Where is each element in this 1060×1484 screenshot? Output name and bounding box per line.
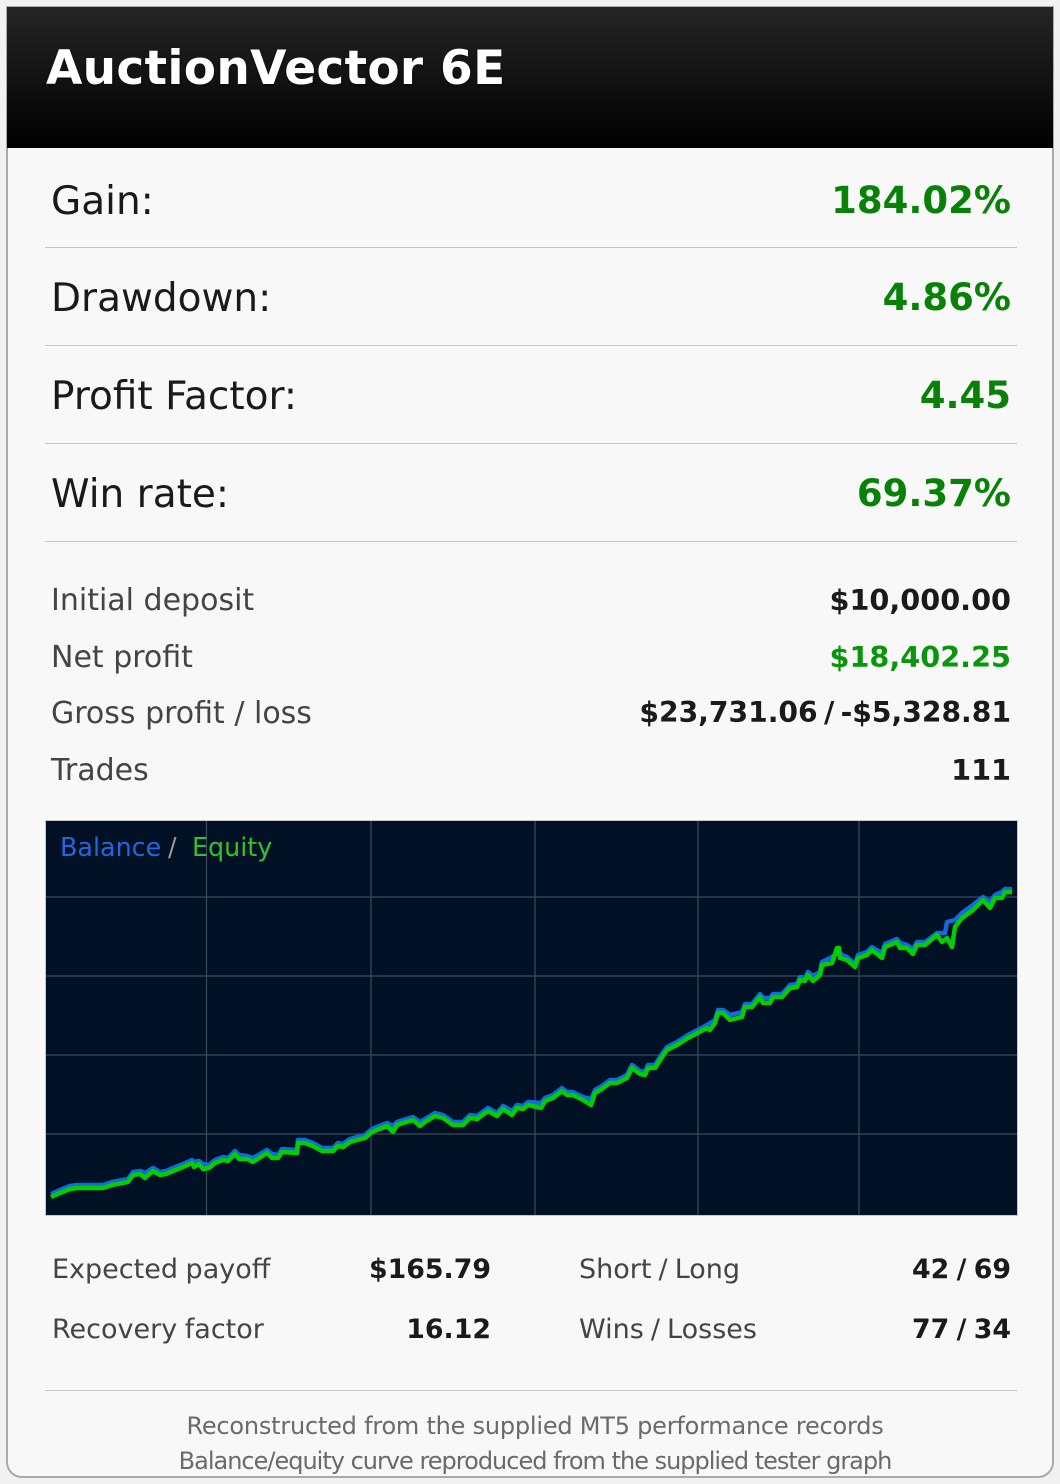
header band <box>7 7 1053 148</box>
footer note <box>179 1412 891 1475</box>
metric: gain <box>51 179 1011 224</box>
stat: recovery factor: Recovery factor <box>52 1314 264 1345</box>
metric: profit factor <box>51 374 1011 419</box>
metric: profit factor: Profit Factor: <box>51 374 297 419</box>
stat: recovery factor <box>52 1314 491 1345</box>
stat: expected payoff: $165.79 <box>369 1254 491 1285</box>
stat: initial deposit: Initial deposit <box>51 583 254 618</box>
footer note: Balance/equity curve reproduced from the supplied tester graph <box>179 1447 891 1475</box>
balance and equity chart <box>45 820 1018 1216</box>
equity line <box>51 892 1012 1197</box>
title: AuctionVector 6E <box>46 41 505 96</box>
stat: gross profit / loss: Gross profit / loss <box>51 696 312 731</box>
chart legend: / <box>168 832 177 862</box>
chart legend: Equity <box>192 832 272 862</box>
stat: initial deposit: $10,000.00 <box>830 583 1011 617</box>
metric: drawdown: Drawdown: <box>51 276 271 321</box>
metric: win rate: 69.37% <box>857 472 1011 515</box>
metric: gain: 184.02% <box>831 179 1011 222</box>
stat: gross profit / loss: $23,731.06 / -$5,328.81 <box>639 696 1011 729</box>
stat: net profit: Net profit <box>51 640 193 675</box>
stat: wins / losses <box>579 1314 1011 1345</box>
stat: expected payoff: Expected payoff <box>52 1254 270 1285</box>
stat: short / long <box>579 1254 1011 1285</box>
stat: trades <box>50 753 1011 788</box>
stat: trades: Trades <box>51 753 149 788</box>
footer note: Reconstructed from the supplied MT5 performance records <box>186 1412 884 1440</box>
stat: short / long: 42 / 69 <box>912 1254 1011 1285</box>
metric: win rate <box>51 472 1011 517</box>
stat: initial deposit <box>51 583 1011 618</box>
stat: net profit <box>51 640 1011 675</box>
metric: win rate: Win rate: <box>51 472 229 517</box>
metric: gain: Gain: <box>51 179 154 224</box>
metric: profit factor: 4.45 <box>920 374 1011 417</box>
chart legend: Balance <box>60 832 161 862</box>
stat: wins / losses: 77 / 34 <box>912 1314 1011 1345</box>
stat: wins / losses: Wins / Losses <box>579 1314 757 1345</box>
stat: expected payoff <box>52 1254 491 1285</box>
stat: short / long: Short / Long <box>579 1254 740 1285</box>
metric: drawdown: 4.86% <box>883 276 1011 319</box>
balance line <box>51 889 1012 1194</box>
chart legend <box>60 832 272 862</box>
stat: net profit: $18,402.25 <box>830 640 1011 674</box>
metric: drawdown <box>51 276 1011 321</box>
stat: recovery factor: 16.12 <box>406 1314 491 1345</box>
stat: gross profit / loss <box>51 696 1011 731</box>
stat: trades: 111 <box>951 753 1011 787</box>
